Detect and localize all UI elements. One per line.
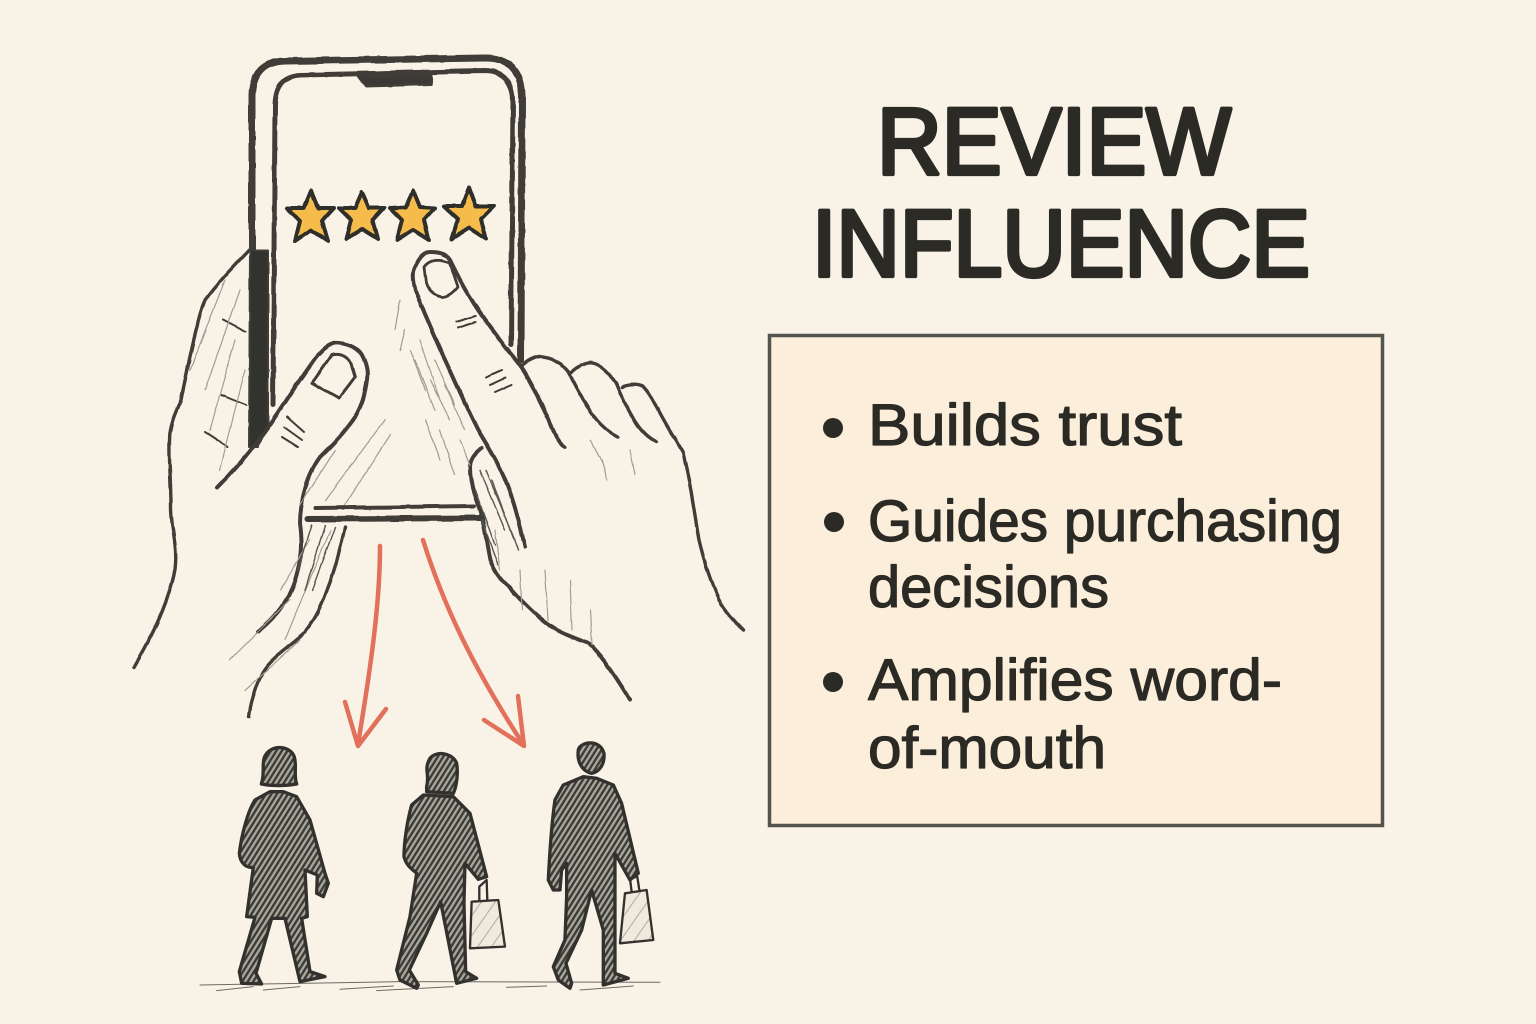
rating stars xyxy=(287,187,494,241)
phone xyxy=(249,58,522,519)
panel: benefits list xyxy=(770,336,1382,826)
person 3 with bag xyxy=(548,743,653,988)
people walking with shopping bags xyxy=(200,743,660,991)
bullet: guides purchasing decisions xyxy=(824,489,1342,620)
hand shading xyxy=(190,280,635,690)
bullet: guides purchasing decisions: decisions xyxy=(868,555,1109,620)
title: REVIEW xyxy=(877,89,1231,195)
title xyxy=(812,89,1310,297)
title: INFLUENCE xyxy=(812,191,1310,297)
bullet: guides purchasing decisions: Guides purchasing xyxy=(868,489,1342,554)
phone notch xyxy=(358,75,431,86)
bullet: amplifies word-of-mouth: Amplifies word- xyxy=(868,648,1282,713)
phone bottom edge xyxy=(316,506,474,508)
arrow: right red arrow xyxy=(423,540,524,746)
person 2 with bag xyxy=(397,754,505,988)
bullet: amplifies word-of-mouth xyxy=(823,648,1282,781)
bullet: amplifies word-of-mouth: of-mouth xyxy=(868,716,1106,781)
illustration: hands holding phone xyxy=(134,58,743,717)
arrow: left red arrow xyxy=(345,546,386,746)
person 1 xyxy=(239,748,328,984)
bullet: builds trust: Builds trust xyxy=(868,393,1182,458)
right hand xyxy=(413,252,743,700)
ground line xyxy=(200,982,660,991)
left hand xyxy=(134,250,367,717)
